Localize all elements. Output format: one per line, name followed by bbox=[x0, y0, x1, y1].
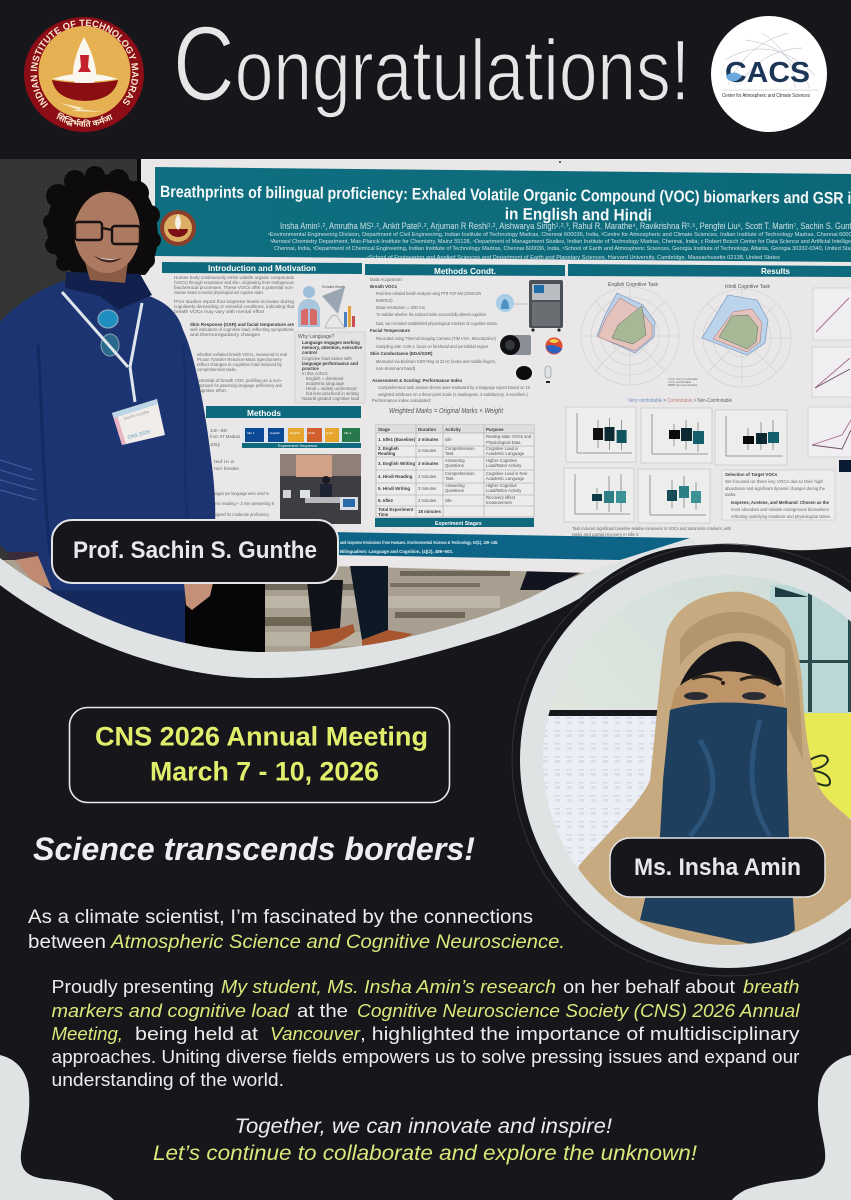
collar bbox=[65, 272, 152, 310]
poster section: methods: min breaks bbox=[214, 466, 240, 471]
window panes bbox=[770, 585, 851, 715]
poster section: introduction and motivation: Introduction and Motivation bbox=[208, 263, 316, 273]
globe grid bbox=[722, 33, 818, 90]
poster section: methods: 25) bbox=[210, 442, 221, 447]
poster section: introduction and motivation: whether exhaled breath VOCs, measured in real bbox=[197, 352, 287, 357]
poster section: introduction and motivation: (VOCs) through respiration and skin, originating from endogenous bbox=[174, 280, 295, 285]
header: logos and title bbox=[24, 5, 827, 132]
poster section: introduction and motivation: cognitively demanding or stressful conditions, indicating that bbox=[174, 304, 295, 309]
name badge: Sachin Gunthe bbox=[123, 409, 150, 421]
radar chart: English cognitive task bbox=[581, 282, 679, 385]
icon: instrument bbox=[529, 280, 563, 332]
poster section: methods continued: Breath VOCs bbox=[370, 284, 398, 289]
poster section: methods continued: Assessment & Scoring: Performance Index bbox=[372, 378, 463, 383]
poster table: experiment stages: Idle bbox=[445, 498, 452, 503]
poster illustration: lungs and exhaled breath bbox=[298, 285, 355, 328]
poster section: methods continued: Comprehension task answer sheets were evaluated by a language expert based on 10 bbox=[378, 385, 530, 390]
selection of target VOCs box bbox=[722, 470, 835, 520]
radar chart: English cognitive task: English Cognitive Task bbox=[608, 282, 658, 288]
mouth bbox=[94, 256, 122, 263]
poster table: experiment stages: Higher Cognitive bbox=[486, 458, 518, 463]
poster box: why language: memory, attention, executive bbox=[302, 345, 363, 350]
name tag: Prof. Sachin S. Gunthe: Prof. Sachin S. Gunthe bbox=[73, 537, 317, 564]
closing lines: Let’s continue to collaborate and explore the unknown! bbox=[153, 1142, 697, 1165]
poster section: introduction and motivation: comprehension tasks. bbox=[197, 367, 237, 372]
radar chart: Hindi cognitive task: Hindi Cognitive Task bbox=[725, 284, 770, 290]
monitor bbox=[543, 710, 663, 872]
name tag: Ms. Insha Amin bbox=[610, 838, 825, 897]
poster table: experiment stages: 3. English Writing bbox=[378, 461, 415, 466]
wall behind presenter bbox=[0, 159, 150, 579]
poster table: experiment stages: 3 minutes bbox=[418, 474, 436, 479]
poster table: experiment stages: Task bbox=[445, 476, 455, 481]
poster table: experiment stages: Academic Language bbox=[486, 476, 525, 481]
poster table: experiment stages: 3 minutes bbox=[418, 448, 436, 453]
experiment sequence flow: Hindi bbox=[326, 431, 333, 435]
radar chart: Hindi cognitive task bbox=[693, 284, 791, 387]
main paragraph: My student, Ms. Insha Amin’s research bbox=[221, 977, 556, 997]
neck bbox=[85, 262, 128, 283]
results footnote: Task induced significant baseline-relative increases in VOCs and autonomic markers, with bbox=[572, 526, 731, 531]
poster table: experiment stages: measurement bbox=[486, 500, 512, 505]
main paragraph: , highlighted the importance of multidisciplinary bbox=[360, 1024, 800, 1044]
poster section: methods continued: Skin Conductance (EDA/GSR) bbox=[370, 351, 433, 356]
hijab bbox=[578, 592, 851, 950]
poster authors and affiliations: ³Aerosol Chemistry Department, Max-Planck-Institute for Chemistry, Mainz 55128, ⁴Department of Management Studies, Indian Institute of Technology Madras, Chennai, India; c Robert Bosch Center for Data Science and Artificial Intelligence bbox=[270, 239, 851, 245]
poster authors and affiliations: ⁷School of Engineering and Applied Sciences and Department of Earth and Planetary Sciences, Harvard University, Cambridge, Massachusetts 02138, United States bbox=[367, 255, 781, 261]
icon: blue lungs bbox=[496, 294, 528, 312]
eyes bbox=[684, 692, 708, 700]
selection of target VOCs box: abundance and significant dynamic changes during the bbox=[725, 486, 826, 491]
cuff and hands bbox=[8, 552, 38, 560]
experiment sequence flow: Hindi bbox=[308, 431, 315, 435]
selection of target VOCs box: We focused on three key VOCs due to their high bbox=[725, 479, 824, 484]
poster section: methods continued: Performance index calculated: bbox=[372, 398, 431, 403]
poster table: experiment stages: 5. Hindi Writing bbox=[378, 486, 410, 491]
poster table: experiment stages: Purpose bbox=[486, 427, 504, 432]
poster section: methods: min reading + 3 min answering 5 bbox=[214, 501, 275, 506]
poster sheet bbox=[141, 159, 851, 573]
main paragraph: understanding of the world. bbox=[52, 1070, 284, 1090]
poster table: experiment stages: Answering bbox=[445, 483, 465, 488]
selection of target VOCs box: Selection of Target VOCs bbox=[725, 472, 778, 477]
poster section: introduction and motivation: biochemical processes. These VOCs offer a potential non- bbox=[174, 285, 295, 290]
poster section: methods continued: non-dominant hand) bbox=[376, 366, 416, 371]
eyebrows bbox=[692, 676, 775, 684]
dark lower panel bbox=[0, 544, 851, 1200]
poster authors and affiliations: Chennai, India, ⁵Department of Chemical Engineering, Indian Institute of Technology Madras, Chennai 600036, India, ⁶School of Earth and Atmospheric Sciences, Georgia Institute of Technology, Atlanta, Georgia 30332-0340, United States bbox=[274, 246, 851, 252]
poster illustration: lungs and exhaled breath: Exhaled Breath bbox=[322, 285, 345, 289]
radar legend: Comfortable bbox=[676, 380, 692, 384]
poster section: methods: from IIT Madras bbox=[210, 434, 241, 439]
poster table: experiment stages: Academic Language bbox=[486, 451, 525, 456]
flame bbox=[73, 37, 96, 88]
poster section: introduction and motivation: approach for assessing language proficiency and bbox=[197, 383, 282, 388]
poster table: experiment stages: Physiological Data bbox=[486, 440, 521, 445]
poster authors and affiliations: ¹Environmental Engineering Division, Department of Civil Engineering, Indian Institute of Technology Madras, Chennai 600036, India, ²Centre for Atmospheric and Climate Sciences, Indian Institute of Technology Madras, Chennai 600036 bbox=[268, 232, 851, 238]
logo: CACS bbox=[711, 16, 827, 132]
poster box: why language: In this cohort: bbox=[302, 371, 328, 376]
name badge: CNS 2026 bbox=[127, 429, 151, 441]
poster box: why language: Natural graded cognitive load bbox=[302, 396, 360, 401]
poster table: experiment stages: Recovery effect bbox=[486, 495, 516, 500]
decorative corner: bottom right bbox=[732, 1055, 851, 1200]
poster table: experiment stages: 4. Hindi Reading bbox=[378, 474, 413, 479]
poster box: why language: Language engages working bbox=[302, 340, 360, 345]
line charts bbox=[808, 288, 851, 457]
icon: thermal face map bbox=[546, 338, 562, 354]
poster box: why language: academic language bbox=[306, 381, 345, 386]
icon: thermal camera bbox=[500, 335, 531, 355]
main paragraph: Proudly presenting bbox=[52, 977, 214, 997]
poster section: introduction and motivation: reflect changes in cognitive load induced by bbox=[197, 362, 283, 367]
radar legend: Non-Comfortable bbox=[676, 383, 698, 387]
poster table: experiment stages: Comprehension bbox=[445, 446, 475, 451]
name tag: Prof. Sachin S. Gunthe bbox=[52, 520, 338, 583]
experiment sequence flow bbox=[242, 427, 361, 448]
poster box: why language: Hindi = widely understood bbox=[306, 386, 357, 391]
poster box: why language: Why Language? bbox=[298, 334, 335, 340]
name badge bbox=[112, 399, 165, 445]
poster table: experiment stages: Activity bbox=[445, 427, 461, 432]
logo: IIT Madras: INDIAN INSTITUTE OF TECHNOLOGY MADRAS bbox=[30, 20, 139, 108]
poster section: introduction and motivation: invasive means to monitor physiological and cognitive states. bbox=[174, 290, 264, 295]
main paragraph: markers and cognitive load bbox=[52, 1001, 290, 1021]
lamp bowl bbox=[52, 74, 118, 82]
poster authors and affiliations bbox=[268, 221, 851, 261]
poster table: experiment stages: 3 minutes bbox=[418, 486, 436, 491]
face bbox=[74, 189, 140, 273]
poster section: methods continued: Data resolution = 200 ms bbox=[376, 305, 426, 310]
poster box: why language: practice bbox=[302, 366, 319, 371]
poster section: introduction and motivation: Proton Transfer Reaction-Mass Spectrometry bbox=[197, 357, 283, 362]
poster box: why language: language performance and bbox=[302, 361, 358, 366]
poster table: experiment stages: 1. Idle1 (Baseline) bbox=[378, 437, 416, 442]
name tag: Ms. Insha Amin: Ms. Insha Amin bbox=[634, 854, 801, 881]
poster table: experiment stages: 3 minutes bbox=[418, 498, 436, 503]
main paragraph: approaches. Uniting diverse fields empowers us to solve pressing issues and expand our bbox=[52, 1047, 800, 1067]
poster section: results: Results bbox=[761, 266, 790, 276]
yellow panel bbox=[804, 713, 851, 818]
poster references bar: Bilingualism: Language and Cognition, (4)(2), 489–503. bbox=[340, 549, 453, 554]
results footnote: tasks and partial recovery in Idle 2 bbox=[572, 532, 639, 537]
curly hair bbox=[43, 166, 161, 275]
poster section: methods: ted in a bbox=[214, 459, 235, 464]
poster table: experiment stages: Cognitive Load in bbox=[486, 446, 519, 451]
experiment sequence flow: Experiment Sequence bbox=[278, 443, 318, 448]
Prof. Gunthe figure bbox=[0, 166, 215, 650]
sunglasses on chest bbox=[98, 310, 119, 356]
icon: GSR finger sensor bbox=[516, 366, 551, 383]
poster table: experiment stages: Resting-state VOCs and bbox=[486, 434, 532, 439]
poster box: why language: but less practiced in writing bbox=[306, 391, 359, 396]
experiment sequence flow: Idle 2 bbox=[344, 431, 352, 435]
poster section: methods bbox=[206, 406, 361, 524]
CACS wordmark: CACS bbox=[725, 57, 810, 89]
face bbox=[670, 671, 785, 712]
background visitors' legs bbox=[185, 566, 413, 658]
event box: CNS 2026 bbox=[70, 708, 450, 802]
carpet floor bbox=[0, 560, 851, 685]
intro sentence: Atmospheric Science and Cognitive Neuroscience. bbox=[110, 932, 565, 953]
glasses bbox=[75, 222, 140, 244]
poster section: methods: signed for moderate proficiency bbox=[214, 512, 270, 517]
poster box: why language bbox=[295, 332, 365, 403]
poster table: experiment stages: Questions bbox=[445, 488, 464, 493]
results footnote bbox=[572, 526, 731, 537]
poster table: experiment stages: Stage bbox=[378, 427, 391, 432]
selection of target VOCs box: Isoprene, Acetone, and Methanol: Chosen as the bbox=[731, 500, 830, 505]
main paragraph: on her behalf about bbox=[563, 977, 735, 997]
poster references bar bbox=[330, 532, 690, 560]
poster section: methods continued: Measured via Biolinam GSR Ring at 32 Hz (index and middle fingers, bbox=[376, 359, 496, 364]
lanyard bbox=[62, 292, 142, 402]
poster logo bbox=[160, 210, 196, 246]
navy conclusions bar bbox=[839, 460, 851, 472]
poster box: why language: control bbox=[302, 350, 317, 355]
intro sentence bbox=[28, 907, 565, 953]
sweater bbox=[0, 281, 215, 590]
main paragraph: at the bbox=[297, 1001, 348, 1021]
poster title: in English and Hindi bbox=[505, 205, 652, 225]
poster table: experiment stages: 2. English bbox=[378, 446, 399, 451]
poster section: introduction and motivation: and thermoregulatory changes bbox=[190, 332, 261, 337]
poster table: experiment stages bbox=[375, 425, 534, 527]
poster section: introduction and motivation: cognitive effort. bbox=[197, 388, 227, 393]
main paragraph: breath bbox=[743, 977, 800, 997]
main paragraph: being held at bbox=[135, 1024, 258, 1044]
bindi bbox=[721, 681, 725, 685]
poster table: experiment stages: 6. Idle2 bbox=[378, 498, 393, 503]
poster section: methods continued: weighted attributes on a three-point scale (1-inadequate, 2-satisfactory, 3-excellent.) bbox=[378, 392, 528, 397]
poster table: experiment stages: Load/Motor Activity bbox=[486, 488, 522, 493]
poster box: why language: Cognitive load varies with bbox=[302, 356, 352, 361]
slogan: Science transcends borders! bbox=[33, 831, 475, 867]
selection of target VOCs box: reflecting underlying metabolic and physiological states. bbox=[731, 514, 831, 519]
niqab bbox=[640, 702, 795, 948]
under-scarf bbox=[680, 641, 782, 690]
poster section: methods: pages per language were used to bbox=[214, 491, 269, 496]
poster section: introduction and motivation: breath VOCs may vary with mental effort bbox=[174, 309, 265, 314]
selection of target VOCs box: tasks: bbox=[725, 492, 736, 497]
poster section: methods continued: To validate whether the induced tasks successfully altered cognitive bbox=[376, 312, 486, 317]
poster table: experiment stages: Task bbox=[445, 451, 455, 456]
comfort scale caption: Very comfortable > Comfortable > Non-Comfortable bbox=[628, 398, 732, 404]
poster section: methods continued: Real-time exhaled breath analysis using PTR-TOF-MS (IONICON bbox=[376, 291, 481, 296]
event box: CNS 2026: March 7 - 10, 2026 bbox=[150, 756, 379, 786]
poster section: introduction and motivation: Human body continuously emits volatile organic compounds bbox=[174, 275, 295, 280]
intro sentence: between bbox=[28, 932, 106, 953]
poster section: methods continued: 6000X2) bbox=[376, 298, 393, 303]
jeans bbox=[40, 583, 185, 650]
poster section: introduction and motivation bbox=[162, 262, 362, 393]
poster table: experiment stages: Duration bbox=[418, 427, 436, 432]
poster table: experiment stages: Reading bbox=[378, 451, 396, 456]
main paragraph bbox=[52, 977, 801, 1090]
box plot panels bbox=[564, 407, 787, 523]
experiment sequence flow: English bbox=[290, 431, 300, 435]
poster table: experiment stages: Questions bbox=[445, 463, 464, 468]
office background bbox=[637, 575, 851, 820]
experiment sequence flow: Idle 1 bbox=[247, 431, 255, 435]
poster section: methods: 18–30 bbox=[210, 428, 228, 433]
poster table: experiment stages: Load/Motor Activity bbox=[486, 463, 522, 468]
poster section: methods continued: Facial Temperature bbox=[370, 328, 410, 333]
poster section: introduction and motivation: potential of breath VOC profiling as a non- bbox=[197, 378, 283, 383]
main paragraph: Meeting, bbox=[52, 1024, 123, 1044]
decorative corner: bottom left bbox=[0, 1055, 114, 1200]
poster table: experiment stages: 18 minutes bbox=[418, 509, 441, 514]
poster experiment photo bbox=[280, 454, 361, 524]
poster table: experiment stages: 3 minutes bbox=[418, 437, 439, 442]
photo: poster session with Prof. Gunthe bbox=[0, 159, 851, 685]
poster section: methods continued: Sampling rate: 0.05 s; focus on forehead and periorbital region bbox=[376, 344, 489, 349]
event box: CNS 2026: CNS 2026 Annual Meeting bbox=[95, 722, 428, 752]
intro sentence: As a climate scientist, I’m fascinated by the connections bbox=[28, 907, 533, 928]
poster section: methods continued: Recorded using Thermal Imaging Camera (TIM VGA, MicroEpsilon) bbox=[376, 336, 496, 341]
poster table: experiment stages: Answering bbox=[445, 458, 465, 463]
radar legend: Very Comfortable bbox=[676, 377, 698, 381]
poster section: methods continued: Weighted Marks = Original Marks × Weight bbox=[389, 406, 504, 415]
poster title bbox=[160, 183, 851, 227]
portrait circle: Ms. Insha Amin bbox=[512, 544, 851, 976]
poster section: introduction and motivation: well indicators of cognitive load, reflecting sympathetic bbox=[190, 327, 295, 332]
poster section: methods continued bbox=[365, 264, 565, 527]
poster table: experiment stages: Experiment Stages bbox=[435, 521, 482, 527]
CACS caption: Center for Atmospheric and Climate Sciences bbox=[722, 93, 810, 99]
poster table: experiment stages: Comprehension bbox=[445, 471, 475, 476]
poster table: experiment stages: 3 minutes bbox=[418, 461, 439, 466]
poster table: experiment stages: Time bbox=[378, 512, 389, 517]
poster header band bbox=[155, 167, 851, 262]
poster table: experiment stages: Total Experiment bbox=[378, 507, 414, 512]
poster section: introduction and motivation: Skin Response (GSR) and facial temperature are bbox=[190, 322, 295, 327]
radar legend bbox=[668, 377, 698, 387]
poster references bar: and Isoprene Emissions from Humans. Environmental Science & Technology, 53(1), 139–148. bbox=[340, 540, 498, 545]
poster table: experiment stages: Idle bbox=[445, 437, 452, 442]
poster section: methods continued: Data Acquisition: bbox=[370, 277, 403, 282]
poster section: results bbox=[564, 264, 851, 537]
closing lines: Together, we can innovate and inspire! bbox=[234, 1115, 612, 1138]
poster section: methods continued: Methods Condt. bbox=[434, 266, 496, 276]
main paragraph: Vancouver bbox=[270, 1024, 361, 1044]
lightning bolt bbox=[60, 103, 103, 112]
closing lines bbox=[153, 1115, 697, 1165]
poster section: methods continued: load, we recorded established physiological markers of cognitive stress. bbox=[376, 321, 498, 326]
sleeve highlights bbox=[0, 460, 36, 500]
title: Congratulations! bbox=[173, 5, 690, 123]
light swoosh band bbox=[0, 538, 700, 678]
poster table: experiment stages: Higher Cognitive bbox=[486, 483, 518, 488]
selection of target VOCs box: most abundant and reliable endogenous biomarkers bbox=[731, 507, 830, 512]
poster section: introduction and motivation: Prior studies report that isoprene levels increase during bbox=[174, 299, 295, 304]
poster section: methods: Methods bbox=[247, 408, 281, 418]
main paragraph: Cognitive Neuroscience Society (CNS) 2026 Annual bbox=[357, 1001, 801, 1021]
cable bbox=[806, 755, 830, 786]
poster table: experiment stages: Cognitive Load in Non- bbox=[486, 471, 529, 476]
poster box: why language: English = dominant bbox=[306, 376, 344, 381]
experiment sequence flow: English bbox=[270, 431, 280, 435]
logo: IIT Madras: सिद्धिर्भवति कर्मजा bbox=[56, 112, 113, 127]
